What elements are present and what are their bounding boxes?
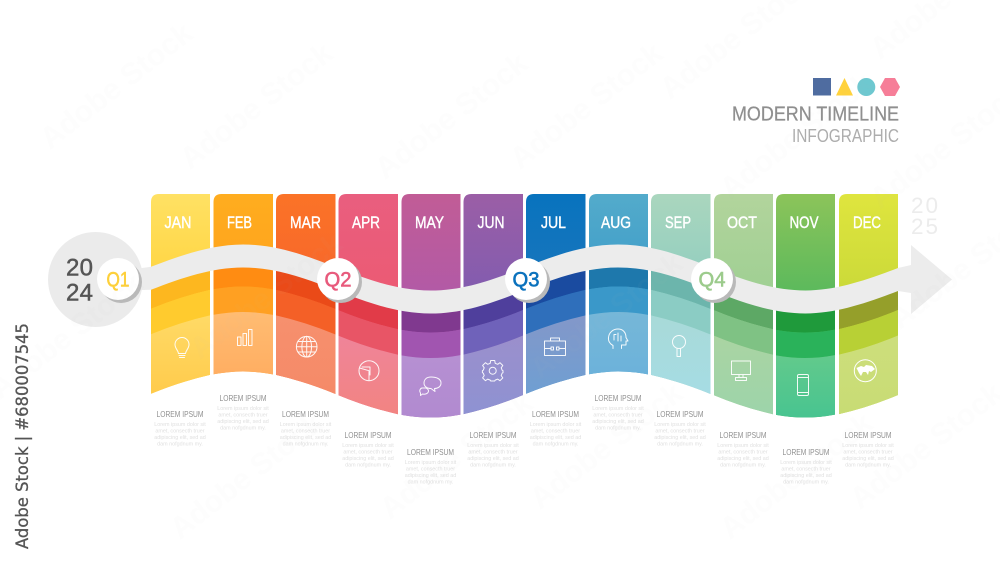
text block: November: LOREM IPSUM [782, 448, 830, 457]
text block: December: adipiscing elit, sed ad [842, 456, 894, 462]
text block: August: Lorem ipsum dolor sit [592, 406, 644, 412]
year start circle 2024: 24 [66, 280, 93, 306]
text block: July: LOREM IPSUM [532, 410, 579, 419]
text block: March: amet, consecth truer [281, 428, 330, 434]
text block: September: dam nofgdnum my. [657, 442, 703, 448]
watermark pattern: Adobe Stock [34, 16, 199, 156]
text block: December: amet, consecth truer [843, 450, 893, 456]
text block: August: amet, consecth truer [593, 412, 643, 418]
panel: December column [839, 194, 898, 414]
subtitle: INFOGRAPHIC [792, 125, 899, 146]
panel: January column [151, 194, 210, 394]
text block: September: LOREM IPSUM [656, 410, 704, 419]
text block: October [717, 431, 769, 468]
text block: April: Lorem ipsum dolor sit [342, 443, 394, 449]
icon: globe [296, 336, 317, 357]
Q1 marker [97, 258, 142, 303]
text block: October: Lorem ipsum dolor sit [717, 443, 769, 449]
panel: June column [464, 194, 523, 414]
text block: February [217, 394, 269, 432]
panel: August column: AUG [601, 214, 631, 232]
watermark pattern: Adobe Stock [504, 36, 669, 176]
text block: November: amet, consecth truer [781, 466, 831, 472]
text block: April: dam nofgdnum my. [345, 462, 391, 468]
text block: October: adipiscing elit, sed ad [717, 456, 769, 462]
text block: April: LOREM IPSUM [344, 431, 392, 440]
text block: November: adipiscing elit, sed ad [780, 473, 832, 479]
text block: May: amet, consecth truer [406, 466, 455, 472]
text block: November: Lorem ipsum dolor sit [780, 460, 832, 466]
text block: March [280, 410, 332, 448]
text block: November: dam nofgdnum my. [783, 480, 829, 486]
text block: October: LOREM IPSUM [720, 431, 767, 440]
text block: September: adipiscing elit, sed ad [654, 435, 706, 441]
text block: August: dam nofgdnum my. [595, 426, 641, 432]
text block: September: Lorem ipsum dolor sit [654, 422, 706, 428]
text block: November [780, 448, 832, 486]
year start circle 2024: 20 [66, 254, 93, 282]
text block: December: LOREM IPSUM [844, 431, 892, 440]
watermark pattern: Adobe Stock [714, 66, 879, 206]
text block: October: dam nofgdnum my. [720, 462, 766, 468]
panel: October column [714, 194, 773, 414]
text block: January: dam nofgdnum my. [157, 442, 203, 448]
panel: February column: FEB [227, 214, 252, 232]
Q4 marker: Q4 [698, 268, 726, 292]
icon: magnifying glass [672, 336, 686, 356]
text block: June: amet, consecth truer [468, 450, 518, 456]
text block: July: dam nofgdnum my. [533, 442, 578, 448]
panel: November column [776, 194, 835, 418]
panel: September column: SEP [665, 214, 691, 232]
icon: light bulb [175, 338, 189, 358]
panel: September column [651, 194, 710, 394]
icon: bar chart [238, 330, 252, 346]
text block: May [405, 448, 457, 486]
text block: December: dam nofgdnum my. [845, 462, 891, 468]
text block: January [154, 410, 206, 448]
panel: July column [526, 194, 586, 394]
panel: May column [402, 194, 460, 418]
panel: March column [276, 194, 336, 394]
panel: July column: JUL [541, 214, 566, 232]
year end label 2025 [911, 193, 938, 239]
watermark pattern: Adobe Stock [524, 376, 689, 516]
text block: June: Lorem ipsum dolor sit [467, 443, 519, 449]
text block: August: LOREM IPSUM [594, 394, 642, 403]
panel: December column: DEC [853, 214, 881, 232]
panel: August column [589, 194, 648, 374]
text block: July: adipiscing elit, sed ad [530, 435, 581, 441]
year start circle 2024 [48, 232, 145, 327]
watermark pattern: Adobe Stock [174, 36, 339, 176]
arrow: wavy timeline [120, 244, 952, 314]
icon row: header shapes [813, 78, 900, 96]
text block: May: LOREM IPSUM [407, 448, 454, 457]
text block: March: adipiscing elit, sed ad [280, 435, 331, 441]
icon: earth [854, 360, 876, 382]
icon: smartphone [798, 374, 808, 396]
text block: September: amet, consecth truer [655, 428, 705, 434]
text block: February: adipiscing elit, sed ad [217, 419, 269, 425]
text block: October: amet, consecth truer [718, 450, 768, 456]
text block: March: Lorem ipsum dolor sit [280, 422, 332, 428]
Q3 marker: Q3 [512, 268, 540, 292]
text block: August: adipiscing elit, sed ad [592, 419, 644, 425]
icon: head with chart [608, 329, 628, 348]
text block: July [530, 410, 582, 448]
watermark pattern: Adobe Stock [714, 406, 879, 546]
icon: speech bubbles [420, 377, 441, 396]
watermark pattern: Adobe Stock [184, 226, 349, 366]
title: MODERN TIMELINE [732, 104, 899, 126]
panel: February column [214, 194, 273, 374]
stock id side text: Adobe Stock | #680007545 [13, 323, 33, 549]
text block: July: amet, consecth truer [531, 428, 580, 434]
watermark pattern: Adobe Stock [524, 246, 689, 386]
icon: pie chart [359, 361, 379, 381]
panel: November column: NOV [790, 214, 818, 232]
panel: May column: MAY [415, 214, 444, 232]
text block: March: dam nofgdnum my. [283, 442, 328, 448]
Q2 marker [317, 258, 362, 303]
text block: April: amet, consecth truer [343, 450, 393, 456]
text block: September [654, 410, 706, 448]
text block: March: LOREM IPSUM [282, 410, 329, 419]
text block: August [592, 394, 644, 432]
text block: June: adipiscing elit, sed ad [467, 456, 519, 462]
text block: June: LOREM IPSUM [470, 431, 517, 440]
text block: January: amet, consecth truer [155, 428, 205, 434]
panel: April column [338, 194, 398, 414]
year end label 2025: 20 [911, 193, 938, 218]
text block: May: dam nofgdnum my. [408, 480, 453, 486]
watermark pattern: Adobe Stock [374, 386, 539, 526]
panel: June column: JUN [478, 214, 504, 232]
panel: April column: APR [352, 214, 380, 232]
text block: June: dam nofgdnum my. [470, 462, 516, 468]
text block: May: adipiscing elit, sed ad [405, 473, 456, 479]
panel: January column: JAN [164, 214, 192, 232]
icon: briefcase [544, 338, 566, 356]
Q1 marker: Q1 [106, 268, 130, 292]
icon: gear [482, 360, 503, 381]
text block: February: amet, consecth truer [218, 412, 268, 418]
watermark pattern: Adobe Stock [369, 46, 534, 186]
Q4 marker [691, 258, 736, 303]
watermark pattern: Adobe Stock [164, 406, 329, 546]
text block: February: LOREM IPSUM [220, 394, 267, 403]
Q2 marker: Q2 [324, 268, 352, 292]
icon: computer monitor [732, 361, 750, 380]
Q3 marker [505, 258, 550, 303]
text block: January: Lorem ipsum dolor sit [154, 422, 206, 428]
text block: April: adipiscing elit, sed ad [342, 456, 394, 462]
text block: May: Lorem ipsum dolor sit [405, 460, 457, 466]
text block: January: LOREM IPSUM [156, 410, 204, 419]
text block: February: dam nofgdnum my. [220, 426, 266, 432]
text block: June [467, 431, 519, 468]
year end label 2025: 25 [911, 214, 938, 239]
text block: December [842, 431, 894, 468]
panel: March column: MAR [290, 214, 321, 232]
text block: February: Lorem ipsum dolor sit [217, 406, 269, 412]
text block: January: adipiscing elit, sed ad [154, 435, 206, 441]
panel: October column: OCT [727, 214, 757, 232]
text block: April [342, 431, 394, 468]
text block: December: Lorem ipsum dolor sit [842, 443, 894, 449]
text block: July: Lorem ipsum dolor sit [530, 422, 582, 428]
